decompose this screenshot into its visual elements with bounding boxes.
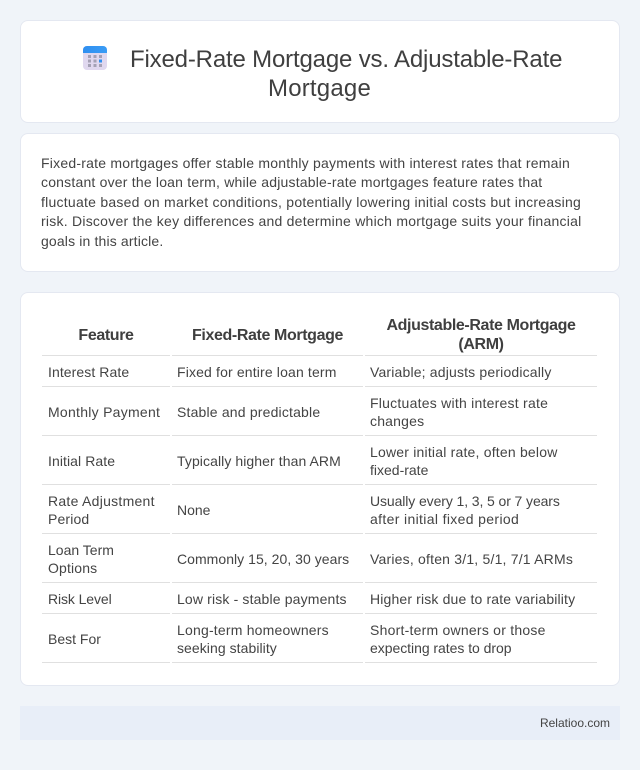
title (130, 46, 562, 102)
footer bar (20, 706, 620, 740)
row: loan term options: Varies, often 3/1, 5/1, 7/1 ARMs (370, 551, 573, 567)
text block: introduction (41, 154, 581, 249)
text block: introduction: constant over the loan term, while adjustable-rate mortgages feature rates that (41, 174, 542, 190)
row: rate adjustment period: Period (48, 511, 89, 527)
row: best for: Short-term owners or those (370, 622, 546, 638)
panel: introduction (20, 133, 620, 272)
row: loan term options (48, 542, 573, 576)
row: best for (48, 622, 546, 656)
text block: introduction: goals in this article. (41, 233, 163, 249)
row: loan term options: Options (48, 560, 97, 576)
row: rate adjustment period: Rate Adjustment (48, 493, 155, 509)
row: initial rate (48, 444, 558, 478)
row: rate adjustment period (48, 493, 560, 527)
table header: (ARM) (458, 336, 504, 353)
table header: Feature (78, 327, 134, 344)
text block: introduction: risk. Discover the key differences and determine which mortgage suits your financial (41, 213, 581, 229)
table header (78, 317, 576, 353)
panel: comparison table (20, 292, 620, 686)
row: best for: Best For (48, 631, 101, 647)
title: Fixed-Rate Mortgage vs. Adjustable-Rate (130, 46, 562, 73)
row: monthly payment: Fluctuates with interest rate (370, 395, 548, 411)
row: interest rate: Variable; adjusts periodically (370, 364, 552, 380)
row: rate adjustment period: after initial fixed period (370, 511, 519, 527)
row: rate adjustment period: None (177, 502, 210, 518)
comparison table (42, 317, 597, 663)
footer credit: Relatioo.com (540, 716, 610, 730)
row: initial rate: Initial Rate (48, 453, 115, 469)
table header: Fixed-Rate Mortgage (192, 327, 343, 344)
row: monthly payment: Monthly Payment (48, 404, 160, 420)
row: risk level (48, 591, 576, 607)
row: interest rate: Fixed for entire loan term (177, 364, 337, 380)
text block: introduction: Fixed-rate mortgages offer stable monthly payments with interest rates that remain (41, 154, 570, 170)
row: loan term options: Commonly 15, 20, 30 years (177, 551, 349, 567)
row: best for: expecting rates to drop (370, 640, 512, 656)
panel: title card (20, 20, 620, 123)
row: risk level: Risk Level (48, 591, 112, 607)
row: interest rate: Interest Rate (48, 364, 129, 380)
row: best for: seeking stability (177, 640, 277, 656)
row: monthly payment: changes (370, 413, 424, 429)
row: risk level: Low risk - stable payments (177, 591, 347, 607)
row: initial rate: Typically higher than ARM (177, 453, 341, 469)
row: risk level: Higher risk due to rate variability (370, 591, 575, 607)
row: rate adjustment period: Usually every 1, 3, 5 or 7 years (370, 493, 560, 509)
table header: Adjustable-Rate Mortgage (386, 317, 576, 334)
row: interest rate (48, 364, 552, 380)
row: initial rate: Lower initial rate, often below (370, 444, 558, 460)
title: Mortgage (268, 75, 371, 102)
row: loan term options: Loan Term (48, 542, 114, 558)
row: best for: Long-term homeowners (177, 622, 329, 638)
icon: calendar (83, 46, 107, 70)
row: monthly payment (48, 395, 548, 429)
row: monthly payment: Stable and predictable (177, 404, 320, 420)
row: initial rate: fixed-rate (370, 462, 428, 478)
text block: introduction: fluctuate based on market conditions, potentially lowering initial costs but increasing (41, 194, 581, 210)
